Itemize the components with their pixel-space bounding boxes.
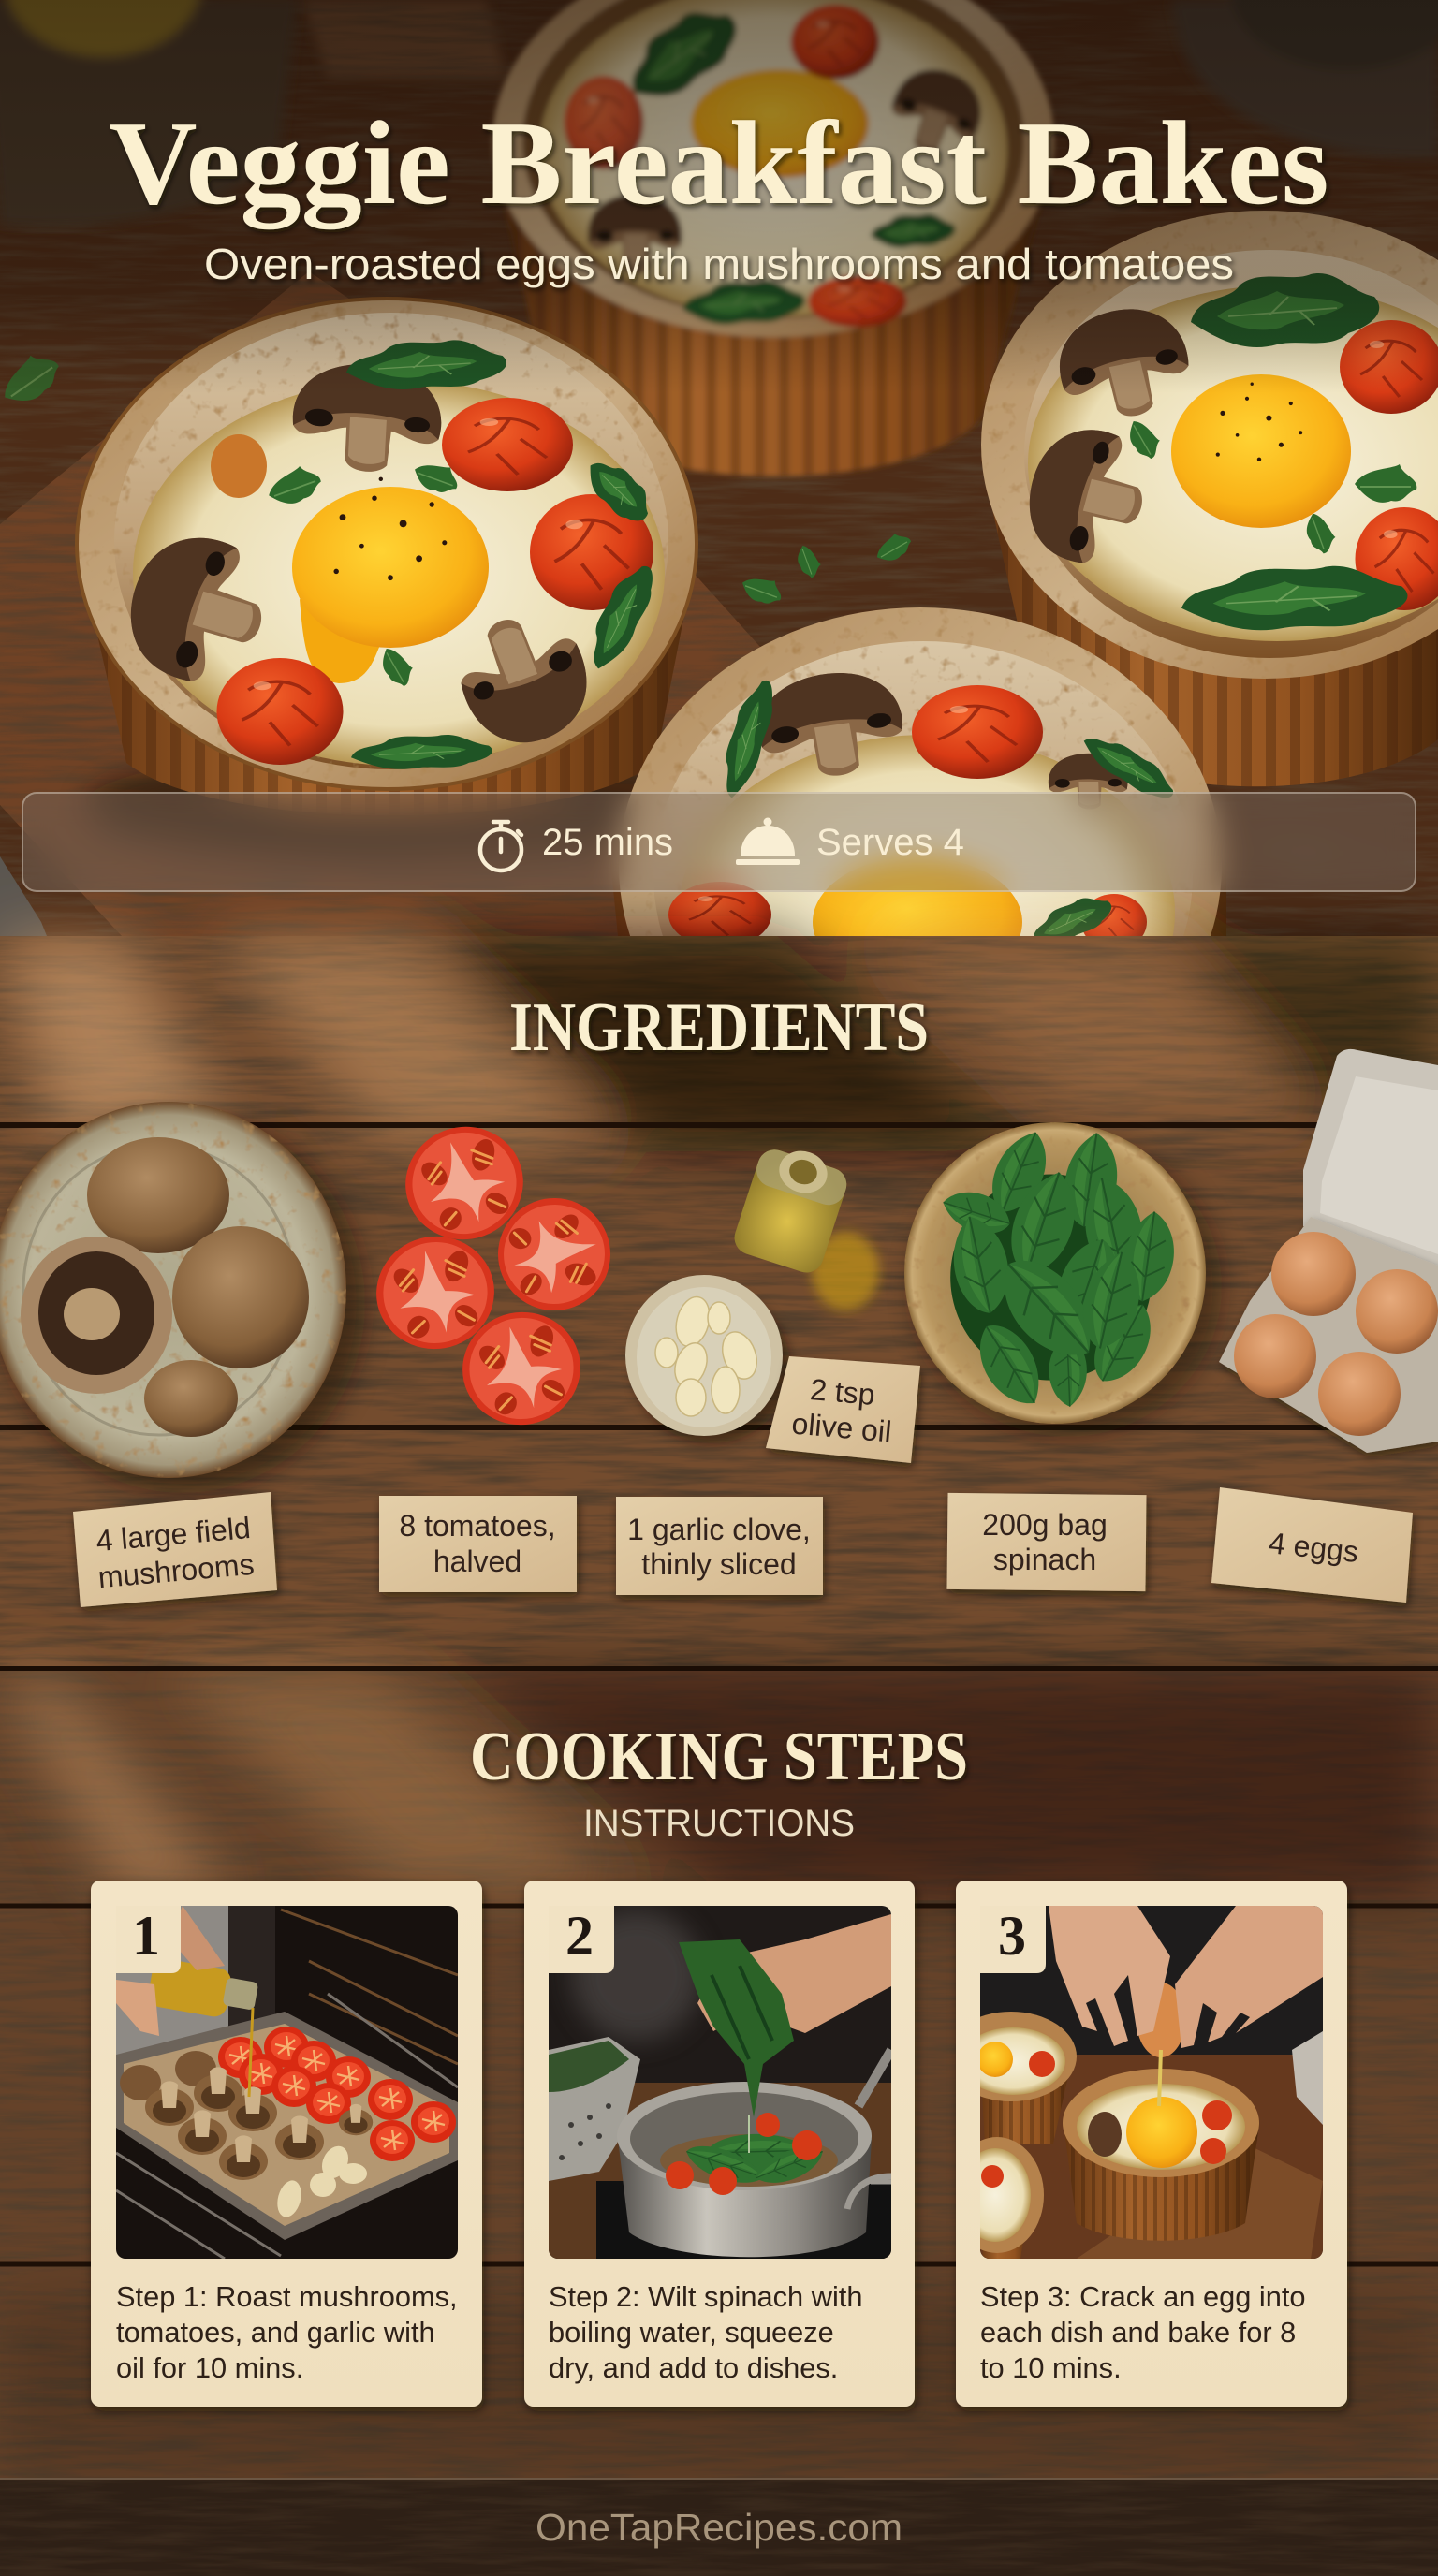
ramekin: bottom centre, cut by the bar (603, 607, 1238, 936)
ingredient: halved tomatoes (368, 1114, 620, 1436)
info bar: time and servings (22, 792, 1416, 892)
step 3 text: each dish and bake for 8 (980, 2316, 1296, 2349)
icon: stopwatch (477, 820, 524, 872)
background bowl: top-right (1170, 0, 1438, 158)
text: time: 25 mins (542, 822, 673, 863)
label: tomatoes (379, 1496, 577, 1592)
ramekin: right (981, 211, 1438, 786)
ramekin: left, main dish (77, 299, 721, 861)
label: eggs (1211, 1487, 1413, 1603)
label: eggs: 4 eggs (1267, 1526, 1360, 1569)
ingredient: bowl of sliced garlic (625, 1275, 790, 1443)
label: garlic: 1 garlic clove, (627, 1513, 811, 1546)
step 1 text: Step 1: Roast mushrooms, (116, 2280, 458, 2313)
text: servings: Serves 4 (816, 822, 964, 863)
subtitle: Oven-roasted eggs with mushrooms and tomatoes (204, 240, 1234, 288)
label: garlic: thinly sliced (641, 1547, 797, 1581)
card: step 3 (946, 1881, 1347, 2407)
label: mushrooms: 4 large field (95, 1511, 252, 1558)
panel: footer band (0, 2478, 1438, 2576)
pan edge (0, 856, 47, 936)
ingredient: olive oil bottle (730, 1138, 879, 1310)
title: Veggie Breakfast Bakes (109, 96, 1329, 229)
number badge: 3 (980, 1905, 1046, 1973)
step 2 text: Step 2: Wilt spinach with (549, 2280, 863, 2313)
step 2 text (549, 2280, 863, 2384)
sub-heading: instructions: INSTRUCTIONS (583, 1803, 855, 1844)
step 2 text: dry, and add to dishes. (549, 2351, 838, 2384)
ramekin: top centre (492, 0, 1054, 476)
panel: ingredients (0, 936, 1438, 1666)
number badge: 1: 1 (132, 1905, 160, 1967)
heading: ingredients: INGREDIENTS (509, 989, 929, 1066)
background bowl: top-left (0, 0, 298, 227)
number badge: 1 (116, 1905, 181, 1973)
ingredient: plate of mushrooms (0, 1102, 365, 1493)
scattered herbs (0, 345, 915, 608)
photo: roasting tray in oven (116, 1906, 458, 2259)
icon: serving cloche (736, 818, 800, 865)
label: mushrooms: mushrooms (96, 1547, 256, 1594)
label: olive oil (766, 1356, 920, 1463)
label: tomatoes: 8 tomatoes, (399, 1509, 556, 1543)
step 1 text (116, 2280, 458, 2384)
label: olive oil: olive oil (790, 1406, 893, 1449)
step 3 text (980, 2280, 1306, 2384)
label: mushrooms (73, 1492, 277, 1607)
step 1 text: oil for 10 mins. (116, 2351, 303, 2384)
panel: hero photo of baked ramekins (0, 0, 1438, 936)
panel: cooking steps (0, 1666, 1438, 2482)
step 3 text: Step 3: Crack an egg into (980, 2280, 1306, 2313)
heading: cooking steps: COOKING STEPS (470, 1719, 968, 1795)
label: tomatoes: halved (433, 1544, 521, 1578)
step 2 text: boiling water, squeeze (549, 2316, 834, 2349)
photo: wilting spinach over pot (549, 1906, 891, 2259)
photo: cracking an egg into ramekin (946, 1906, 1323, 2259)
number badge: 2 (549, 1905, 614, 1973)
footer text: OneTapRecipes.com (536, 2506, 902, 2549)
number badge: 2: 2 (565, 1905, 594, 1967)
label: spinach: 200g bag (982, 1508, 1108, 1542)
ingredient: bowl of spinach (904, 1122, 1222, 1437)
label: spinach: spinach (993, 1543, 1096, 1576)
label: garlic (616, 1497, 823, 1595)
card: step 2 (524, 1881, 915, 2407)
label: spinach (946, 1493, 1147, 1591)
step 3 text: to 10 mins. (980, 2351, 1122, 2384)
label: olive oil: 2 tsp (809, 1372, 876, 1412)
card: step 1 (91, 1881, 482, 2407)
step 1 text: tomatoes, and garlic with (116, 2316, 435, 2349)
number badge: 3: 3 (998, 1905, 1026, 1967)
ingredient: egg carton (1219, 1049, 1438, 1453)
